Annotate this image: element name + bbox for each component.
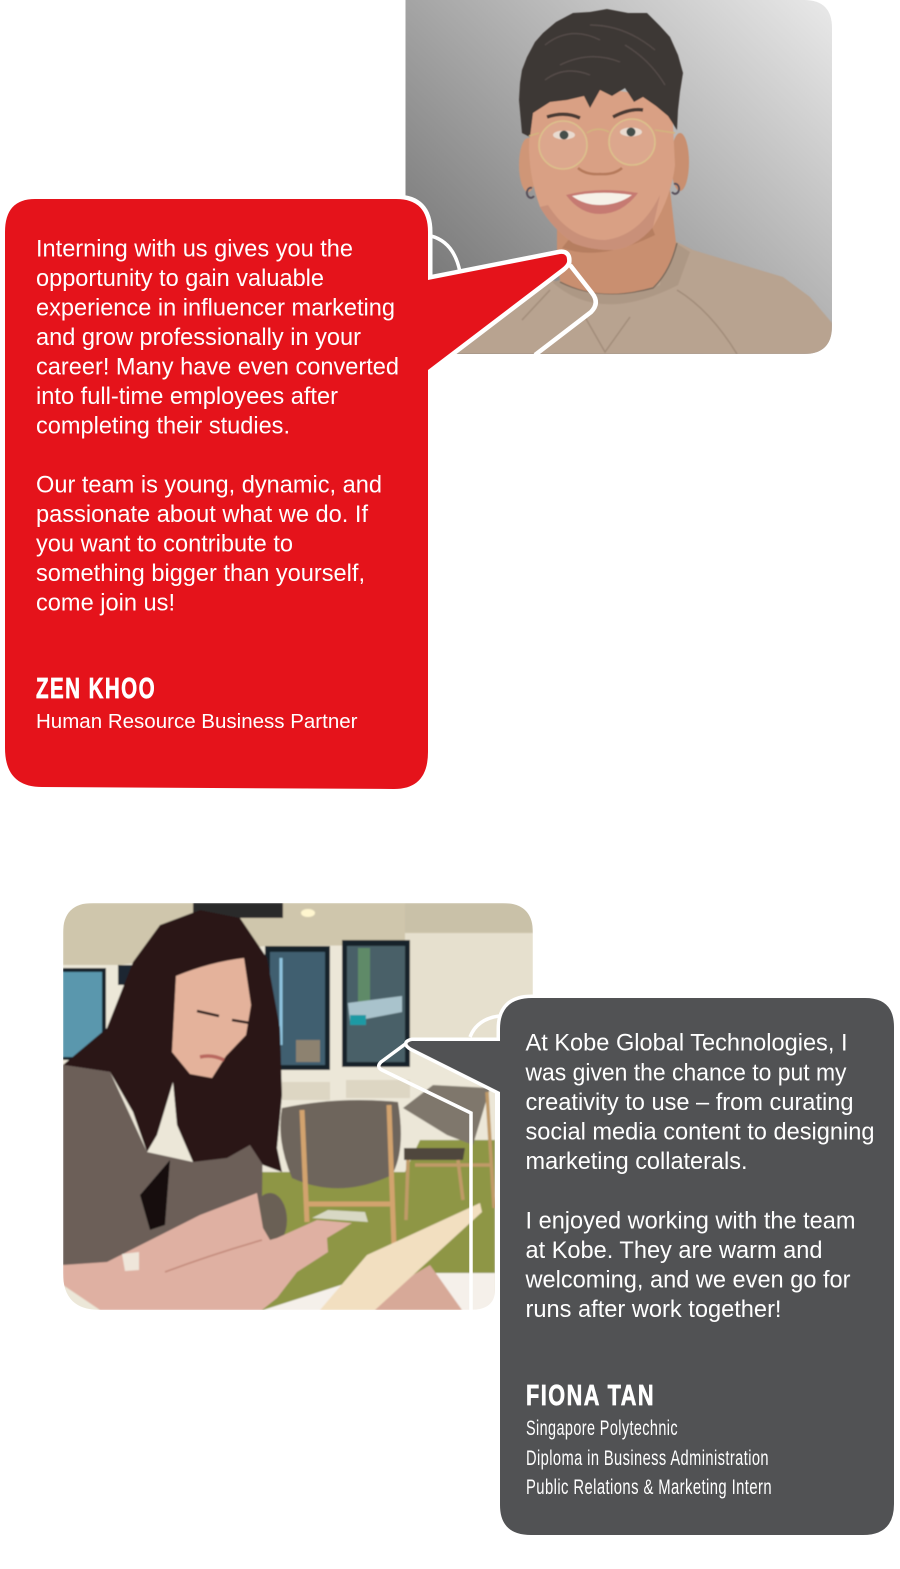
nose bbox=[578, 168, 622, 174]
ears bbox=[518, 138, 534, 192]
details: Fiona Tan: Singapore Polytechnic bbox=[526, 1417, 678, 1440]
text block: Zen Khoo quote: into full-time employees after bbox=[36, 383, 338, 410]
text block: Zen Khoo quote: come join us! bbox=[36, 590, 175, 616]
face bbox=[529, 90, 675, 250]
details: Fiona Tan: Public Relations & Marketing Intern bbox=[526, 1476, 772, 1499]
hair bbox=[63, 910, 282, 1172]
lower wall panels bbox=[282, 1080, 410, 1100]
text block: Fiona Tan quote: social media content to designing bbox=[526, 1118, 874, 1146]
back chair bbox=[403, 1085, 490, 1145]
white outline behind grey speech tail bbox=[379, 1042, 471, 1310]
panel: red speech bubble bbox=[5, 199, 567, 789]
name: Fiona Tan: FIONA TAN bbox=[526, 1380, 655, 1412]
text block: Zen Khoo quote: you want to contribute to bbox=[36, 530, 293, 558]
face bbox=[172, 958, 251, 1078]
eyes bbox=[553, 130, 575, 140]
arms, knee and hand bbox=[63, 1193, 352, 1310]
panel: grey speech bubble bbox=[408, 998, 894, 1535]
table bbox=[263, 1273, 495, 1310]
text block: Fiona Tan quote: at Kobe. They are warm and bbox=[526, 1237, 822, 1264]
hair bbox=[519, 9, 683, 137]
text block: Zen Khoo quote: completing their studies. bbox=[36, 412, 290, 440]
earrings bbox=[527, 184, 679, 198]
stool bbox=[258, 1192, 288, 1240]
smile bbox=[566, 190, 638, 214]
text block: Zen Khoo quote bbox=[36, 236, 399, 616]
glasses bbox=[539, 121, 587, 169]
photo: Fiona Tan working on a tablet bbox=[63, 903, 533, 1310]
text block: Zen Khoo quote: opportunity to gain valuable bbox=[36, 265, 324, 292]
text block: Zen Khoo quote: and grow professionally in your bbox=[36, 324, 361, 351]
windows bbox=[63, 968, 106, 1060]
text block: Fiona Tan quote: marketing collaterals. bbox=[526, 1148, 748, 1175]
front chair bbox=[280, 1100, 401, 1188]
text block: Zen Khoo quote: Interning with us gives you the bbox=[36, 236, 353, 262]
text block: Zen Khoo quote: experience in influencer marketing bbox=[36, 294, 395, 322]
details: Fiona Tan bbox=[526, 1417, 772, 1499]
text block: Zen Khoo quote: passionate about what we do. If bbox=[36, 501, 368, 528]
small arc behind red bubble bbox=[431, 236, 460, 272]
text block: Fiona Tan quote: I enjoyed working with the team bbox=[526, 1208, 856, 1234]
text block: Zen Khoo quote: Our team is young, dynamic, and bbox=[36, 472, 382, 498]
small arc behind grey bubble bbox=[470, 1016, 499, 1037]
floor bbox=[255, 1140, 495, 1310]
top bbox=[63, 1065, 263, 1270]
text block: Zen Khoo quote: something bigger than yourself, bbox=[36, 560, 365, 587]
photo: Zen Khoo portrait bbox=[405, 0, 832, 354]
brows bbox=[547, 110, 643, 118]
sweater bbox=[455, 237, 832, 354]
text block: Fiona Tan quote: welcoming, and we even go for bbox=[525, 1266, 851, 1294]
white outline behind speech tail bbox=[535, 265, 596, 355]
text block: Fiona Tan quote: At Kobe Global Technologies, I bbox=[526, 1030, 848, 1056]
role: Zen Khoo: Human Resource Business Partner bbox=[36, 710, 358, 733]
text block: Fiona Tan quote bbox=[525, 1030, 874, 1323]
tablet bbox=[375, 1264, 462, 1310]
neck bbox=[557, 190, 676, 294]
text block: Fiona Tan quote: creativity to use – from curating bbox=[526, 1089, 854, 1116]
text block: Fiona Tan quote: was given the chance to put my bbox=[525, 1060, 846, 1086]
name: Zen Khoo: ZEN KHOO bbox=[36, 673, 156, 705]
text block: Fiona Tan quote: runs after work together! bbox=[526, 1296, 782, 1323]
text block: Zen Khoo quote: career! Many have even converted bbox=[36, 354, 399, 380]
details: Fiona Tan: Diploma in Business Administration bbox=[526, 1447, 769, 1470]
